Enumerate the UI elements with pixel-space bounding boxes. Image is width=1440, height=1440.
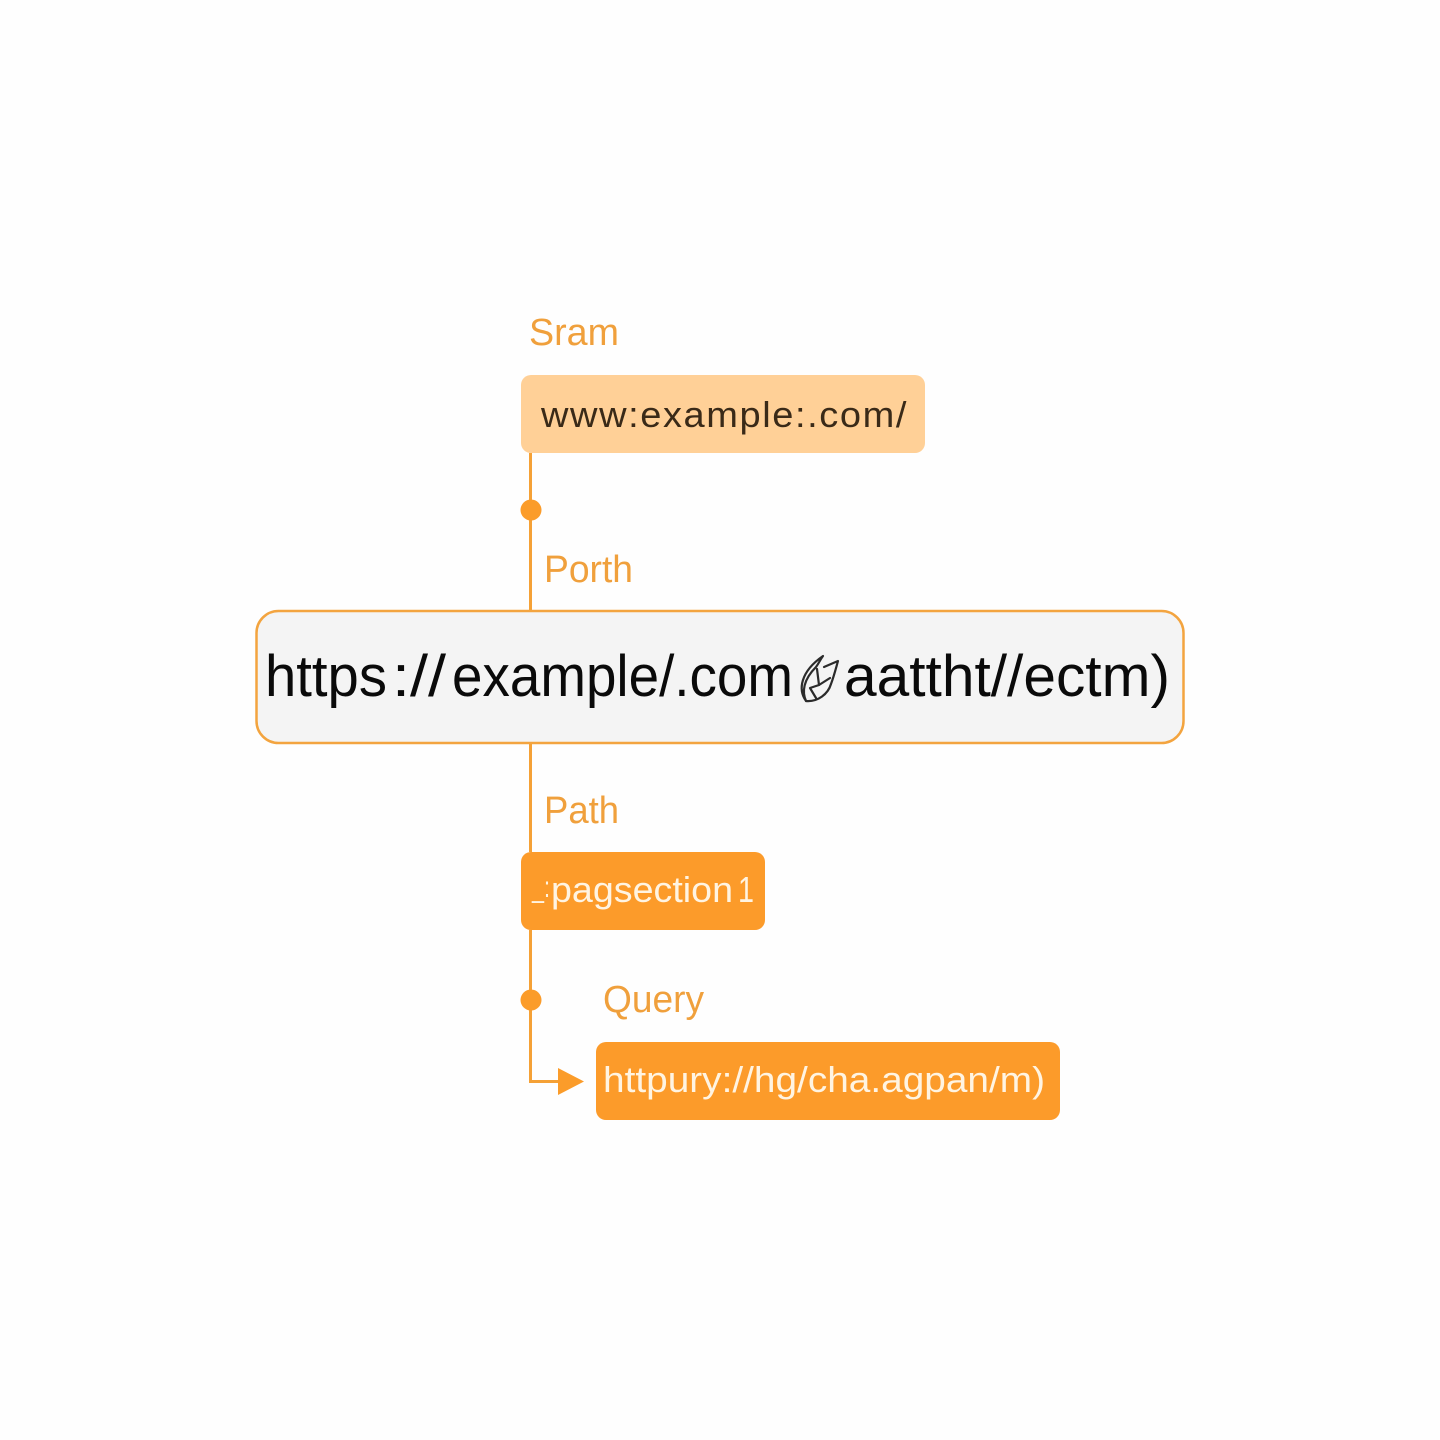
box: query string: httpury://hg/cha.agpan/m) (603, 1059, 1045, 1100)
box: path segment (521, 852, 765, 930)
box: path segment: 1 (738, 869, 754, 910)
connector: vertical trunk line with branch to query (530, 453, 560, 1082)
full URL text, scheme: https (265, 644, 387, 709)
label: Sram: Sram (529, 312, 619, 354)
label: Path: Path (544, 790, 619, 832)
node dot: upper (520, 500, 542, 520)
box: path segment: _: (531, 871, 550, 904)
node dot: lower (520, 990, 542, 1010)
icon: leaf glyph (802, 656, 838, 701)
label: Query: Query (603, 979, 704, 1021)
box: host (521, 375, 925, 453)
box: host: www:example:.com/ (540, 394, 908, 435)
full URL text, separator: :// (392, 644, 447, 709)
label: Porth: Porth (544, 549, 633, 591)
box: query string (596, 1042, 1060, 1120)
arrow head (558, 1068, 584, 1095)
panel: full URL bar (256, 611, 1184, 743)
full URL text, domain: example/.com (452, 644, 793, 709)
full URL text, trailing part: aattht//ectm) (844, 644, 1170, 709)
box: path segment: pagsection (551, 869, 733, 910)
